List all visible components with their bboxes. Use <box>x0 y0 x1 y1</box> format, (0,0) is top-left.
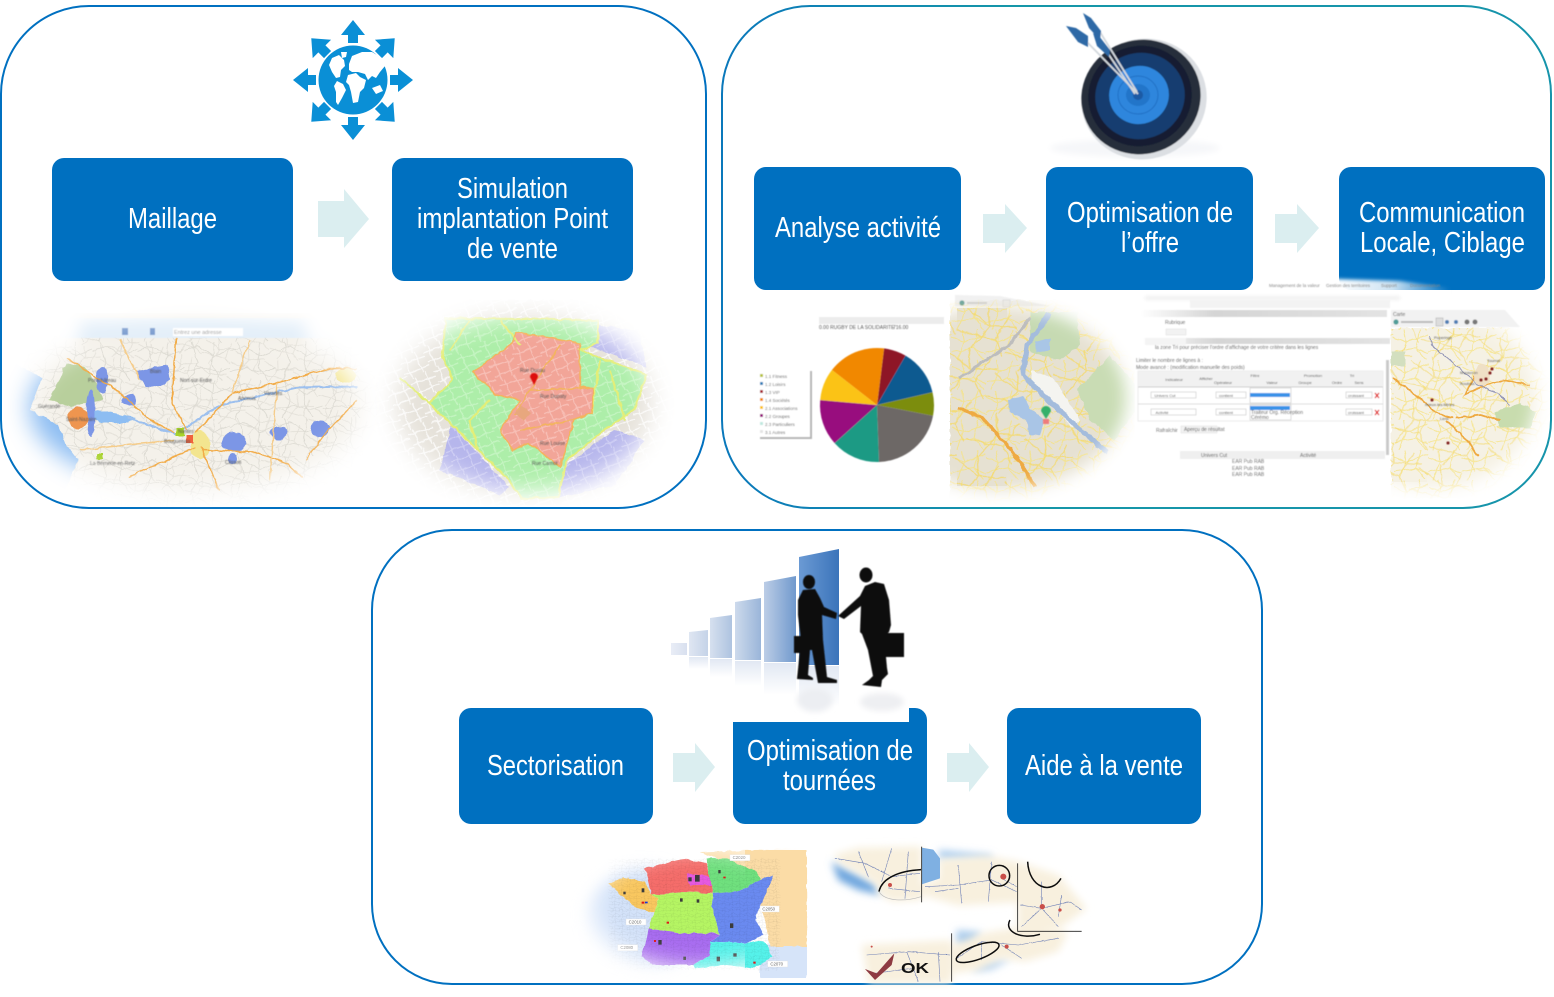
criteria table: Indicateur <box>1165 377 1183 382</box>
box: Simulation implantation Point de vente: de vente <box>467 233 558 265</box>
pin and street labels <box>520 368 567 467</box>
criteria table: Sens <box>1354 380 1364 385</box>
legend: 1.2 Loisirs <box>765 382 786 387</box>
legend: 2.1 Associations <box>765 406 798 411</box>
box: Maillage: Maillage <box>128 203 217 235</box>
criteria table: Activité <box>1156 410 1169 415</box>
map toolbar: Entrez une adresse <box>174 330 222 336</box>
criteria table: contient <box>1219 393 1234 398</box>
map toolbar: Varades <box>264 391 283 397</box>
legend: 1.1 Fitness <box>765 374 788 379</box>
arrow: optimisation to communication <box>1275 204 1319 253</box>
menu bar fade: Support <box>1381 283 1398 288</box>
map: France sectors: C2020 <box>733 855 746 860</box>
map: France sectors: C2010 <box>629 919 642 924</box>
map: Loire-Atlantique catchment areas <box>14 316 367 509</box>
map toolbar: Bouguenais <box>164 439 191 445</box>
panel: sectorisation <box>372 530 1262 985</box>
illustration: handshake over rising bars <box>668 545 909 722</box>
box: Optimisation de tournées: tournées <box>783 765 876 797</box>
box: Analyse activité <box>754 167 961 290</box>
map: France sectors: C2070 <box>770 962 784 967</box>
criteria table: croissant <box>1348 410 1365 415</box>
pie <box>820 348 934 462</box>
screenshot: targeting form: la zone Tri pour préciser l'ordre d'affichage de votre critère dans les lignes <box>1155 345 1319 351</box>
map toolbar: La Bernerie-en-Retz <box>90 461 136 467</box>
box: Aide à la vente <box>1007 708 1201 824</box>
legend <box>758 369 812 439</box>
criteria table: Groupe <box>1298 380 1312 385</box>
map: route optimisation with OK: OK <box>901 960 929 977</box>
criteria table: Univers Cut <box>1155 393 1176 398</box>
map toolbar: Pontchâteau <box>88 378 116 384</box>
map toolbar: Nort-sur-Erdre <box>180 378 212 384</box>
map toolbar: regional map: Carte <box>1393 312 1405 318</box>
legend: 2.3 Particuliers <box>765 422 796 427</box>
criteria table: Traiteur Org. Réception <box>1251 410 1303 416</box>
menu bar fade: Gestion des territoires <box>1326 283 1371 288</box>
city markers and labels: Lens <box>1440 416 1449 421</box>
screenshot: targeting form <box>1135 296 1400 502</box>
legend: 2.2 Groupes <box>765 414 791 419</box>
menu bar fade <box>1269 279 1450 294</box>
result table: EAR Pub RAB <box>1232 459 1265 465</box>
legend: 1.3 VIP <box>765 390 780 395</box>
result table: Activité <box>1300 453 1316 459</box>
screenshot: targeting form: Rubrique <box>1165 320 1186 326</box>
map: route optimisation with OK <box>832 847 1087 983</box>
city markers and labels: Nœux-les-Mines <box>1425 402 1454 407</box>
legend: 1.4 Sociétés <box>765 398 791 403</box>
box: Simulation implantation Point de vente: implantation Point <box>417 203 608 235</box>
arrow: maillage to simulation <box>318 189 369 248</box>
city markers and labels: Mouscron <box>1460 370 1478 375</box>
pin and street labels: Rue Ducau <box>520 368 545 374</box>
pin and street labels: Rue Dupaty <box>540 394 567 400</box>
screenshot: targeting form: Mode avancé : (modification manuelle des poids) <box>1136 365 1245 371</box>
panel: maillage <box>0 6 706 510</box>
criteria table: Tri <box>1350 373 1354 378</box>
map: regional coverage <box>1391 328 1551 498</box>
map toolbar: Clisson <box>225 460 242 466</box>
criteria table: Opérateur <box>1214 380 1233 385</box>
sea <box>586 863 679 969</box>
box: Optimisation de l'offre <box>1046 167 1253 290</box>
map toolbar: Blain <box>150 369 161 375</box>
screenshot: targeting form: Limiter le nombre de lignes à : <box>1136 358 1203 364</box>
silhouette: right man <box>838 568 904 687</box>
panel: analyse <box>722 6 1551 508</box>
city markers and labels <box>1425 335 1500 444</box>
box: Aide à la vente: Aide à la vente <box>1025 750 1183 782</box>
map: point of sale catchment simulation <box>388 306 660 500</box>
box: Simulation implantation Point de vente: Simulation <box>457 173 568 205</box>
arrow: analyse to optimisation <box>983 204 1027 253</box>
box: Analyse activité: Analyse activité <box>775 212 941 244</box>
map: city with river <box>950 300 1150 505</box>
criteria table: Valeur <box>1266 380 1278 385</box>
criteria table: Ordre <box>1332 380 1343 385</box>
box: Optimisation de tournées: Optimisation de <box>747 735 913 767</box>
table header: 0.00 RUGBY DE LA SOLIDARITE <box>819 325 895 331</box>
city markers and labels: Tournai <box>1487 358 1500 363</box>
map toolbar <box>38 319 312 466</box>
box: Sectorisation <box>459 708 653 824</box>
box: Communication Locale, Ciblage: Locale, Ciblage <box>1360 227 1525 259</box>
criteria table: Promotion <box>1304 373 1322 378</box>
city markers and labels: Roubaix <box>1460 381 1475 386</box>
map: France sectors: C2050 <box>762 907 776 912</box>
icon: target with arrows <box>1050 13 1224 177</box>
criteria table: contient <box>1219 410 1234 415</box>
arrow: sectorisation to optimisation <box>673 743 715 792</box>
chart: activity pie with legend <box>758 317 944 462</box>
box: Sectorisation: Sectorisation <box>487 750 624 782</box>
map toolbar: Nantes <box>178 429 194 435</box>
map toolbar: city map <box>955 295 1050 307</box>
screenshot: targeting form: Rafraîchir <box>1156 428 1178 434</box>
pin <box>1041 406 1051 424</box>
criteria table: Cérémo <box>1251 415 1269 421</box>
criteria table: Filtre <box>1251 373 1260 378</box>
criteria table: croissant <box>1348 393 1365 398</box>
pin and street labels: Rue Carnot <box>532 461 558 467</box>
legend: 3.1 Autres <box>765 430 786 435</box>
result table <box>1180 451 1385 478</box>
map toolbar: Ancenis <box>238 396 256 402</box>
criteria table: Afficher <box>1199 376 1213 381</box>
map toolbar: Guérande <box>38 404 60 410</box>
city markers and labels: Poperinge <box>1434 335 1453 340</box>
map: France sectors <box>578 848 807 985</box>
table header <box>819 317 944 331</box>
pin and street labels: Rue Louise <box>540 441 566 447</box>
icon: globe with arrows <box>293 20 413 140</box>
menu bar fade: Documentation <box>1410 283 1441 288</box>
screenshot: targeting form: Aperçu de résultat <box>1184 427 1225 433</box>
map toolbar: regional map <box>1391 310 1520 327</box>
box: Simulation implantation Point de vente <box>392 158 633 281</box>
table header: 716.00 <box>893 325 909 331</box>
map: France sectors: C2080 <box>620 945 634 950</box>
box: Communication Locale, Ciblage <box>1339 167 1545 290</box>
box: Optimisation de l'offre: l’offre <box>1121 227 1179 259</box>
silhouette: left man <box>794 575 837 683</box>
box: Maillage <box>52 158 293 281</box>
result table: Univers Cut <box>1201 453 1228 459</box>
result table: EAR Pub RAB <box>1232 466 1265 472</box>
box: Optimisation de tournées <box>733 708 927 824</box>
menu bar fade: Management de la valeur <box>1269 283 1320 288</box>
result table: EAR Pub RAB <box>1232 472 1265 478</box>
map toolbar: Saint-Nazaire <box>66 417 97 423</box>
criteria table <box>1138 371 1383 421</box>
box: Optimisation de l'offre: Optimisation de <box>1067 197 1233 229</box>
arrow: optimisation to aide <box>947 743 989 792</box>
